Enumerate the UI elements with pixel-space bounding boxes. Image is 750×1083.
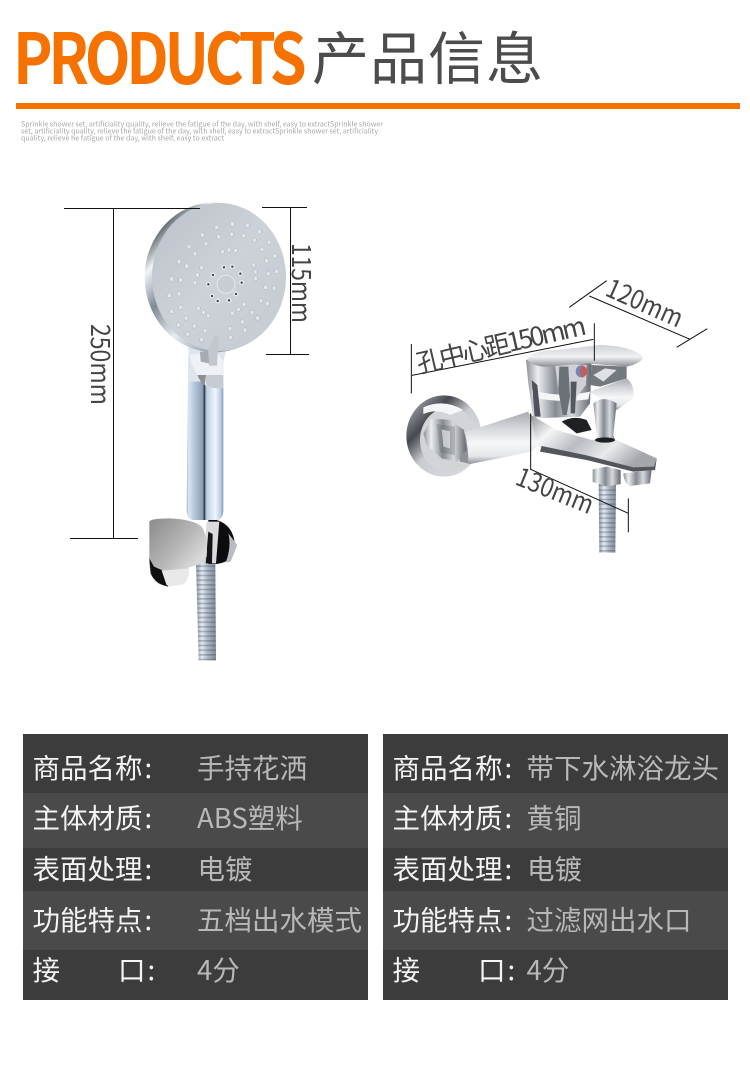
row: 接口: 4分 (197, 948, 240, 988)
row: 商品名称: 手持花洒 (197, 746, 307, 786)
row: 表面处理: 表面处理: (32, 847, 152, 887)
thumb tab (208, 334, 219, 366)
row: 商品名称: 商品名称: (392, 746, 512, 786)
wall bracket (149, 518, 237, 587)
row: 主体材质: 主体材质: (32, 796, 152, 836)
diverter knob (593, 399, 617, 440)
row: 接口: 4分 (526, 948, 569, 988)
hose (196, 562, 216, 660)
row: 商品名称: 商品名称: (32, 746, 152, 786)
row: 商品名称 (392, 746, 719, 786)
label: 115mm: 115mm (284, 243, 321, 323)
row: 功能特点 (392, 898, 692, 938)
subtitle text: Sprinkle shower set, artificiality quality, relieve the fatigue of the day, with shelf, easy to extractSprinkle shower (21, 120, 383, 130)
hex nut (423, 418, 467, 462)
label: 250mm: 250mm (83, 324, 120, 405)
subtitle text (21, 120, 383, 144)
inner dark nozzles (206, 265, 243, 303)
row: 接口: 口: (118, 948, 155, 988)
row: 接口 (392, 948, 569, 988)
subtitle text: quality, relieve he fatigue of the day, with shelf, easy to extract (21, 134, 224, 144)
row: 功能特点: 功能特点: (32, 898, 152, 938)
shower head product (145, 202, 286, 660)
label: 130mm: 130mm (511, 457, 600, 522)
handle (187, 353, 223, 520)
hot and cold marker (576, 365, 587, 377)
row: 功能特点: 功能特点: (392, 898, 512, 938)
row: 商品名称: 带下水淋浴龙头 (526, 746, 719, 786)
row: 接口 (32, 948, 240, 988)
lever handle (527, 345, 643, 367)
header (13, 3, 740, 144)
row: 表面处理: 电镀 (198, 847, 252, 887)
row: 主体材质 (32, 796, 303, 836)
outlet (623, 470, 652, 486)
spec table: hand shower (23, 734, 368, 1000)
hose under faucet (599, 483, 616, 553)
row: 功能特点: 五档出水模式 (197, 898, 362, 938)
row: 接口: 口: (478, 948, 515, 988)
title: 产品信息: 产品信息 (312, 14, 543, 96)
row: 接口: 接 (32, 948, 60, 988)
orange divider bar (16, 103, 740, 109)
row: 主体材质 (392, 796, 582, 836)
spray nozzles (167, 222, 279, 342)
title: PRODUCTS: PRODUCTS (13, 3, 304, 104)
spec table: bath faucet (383, 734, 728, 1000)
shower head disc (145, 202, 286, 366)
neck of shower head (188, 347, 227, 388)
row: 商品名称 (32, 746, 307, 786)
spout (529, 414, 657, 472)
row: 表面处理 (32, 847, 252, 887)
faucet product (406, 345, 657, 553)
row: 功能特点: 过滤网出水口 (526, 898, 692, 938)
row: 主体材质: 黄铜 (526, 796, 582, 836)
row: 接口: 接 (392, 948, 420, 988)
wall flange (406, 395, 482, 477)
row: 功能特点 (32, 898, 362, 938)
row: 主体材质: ABS塑料 (197, 796, 303, 836)
row: 表面处理: 表面处理: (392, 847, 512, 887)
row: 表面处理 (392, 847, 582, 887)
faucet body (526, 360, 592, 418)
row: 表面处理: 电镀 (527, 847, 582, 887)
dimension lines: faucet (411, 281, 707, 532)
subtitle text: set, artificiality quality, relieve the fatigue of the day, with shelf, easy to extractSprinkle shower set, artificiality (21, 126, 378, 136)
arm (455, 412, 538, 464)
diverter lever (590, 378, 634, 410)
row: 主体材质: 主体材质: (392, 796, 512, 836)
label: 孔中心距150mm: 孔中心距150mm (412, 306, 589, 381)
label: 120mm: 120mm (601, 269, 690, 335)
dimension lines: shower head (64, 207, 309, 538)
hose nut (593, 467, 621, 487)
